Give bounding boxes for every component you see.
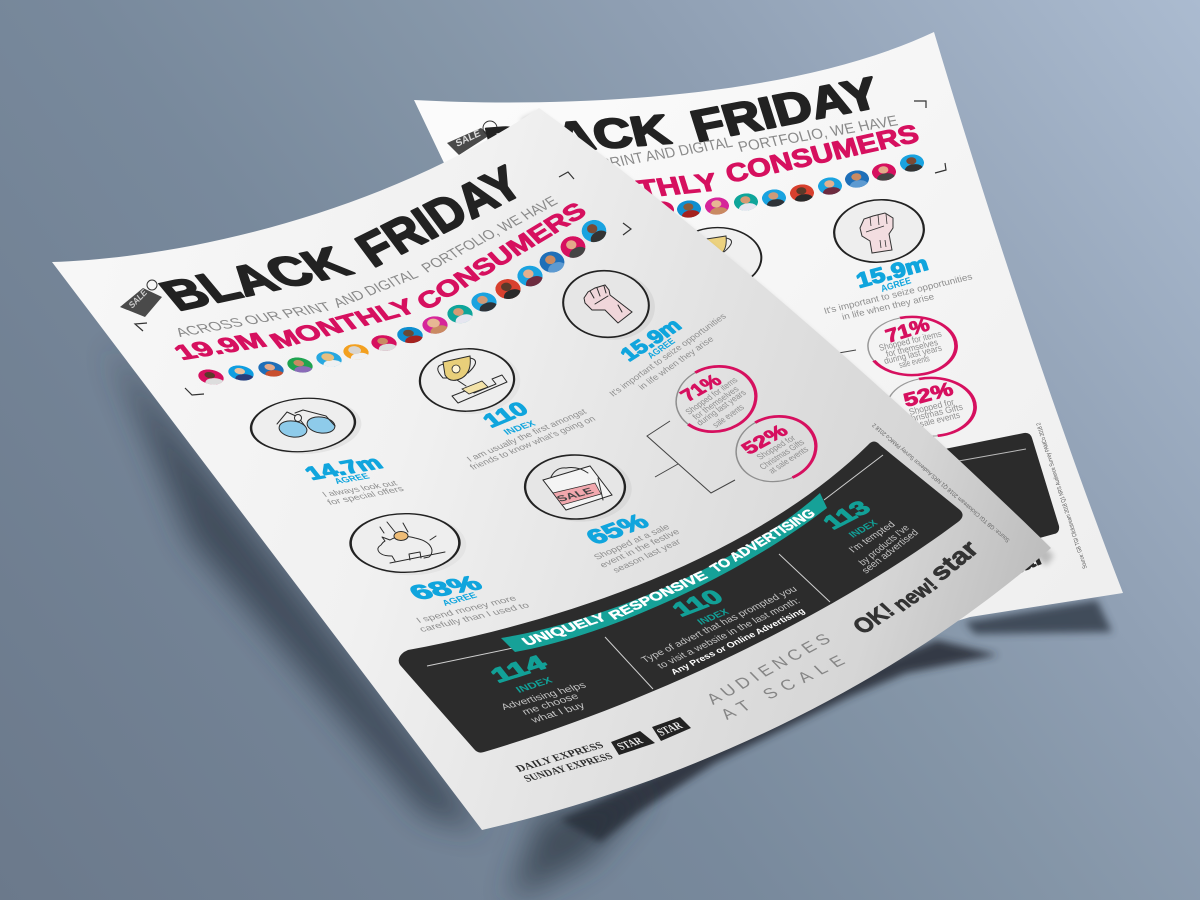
- stat: 15.9m: It's important to seize opportunities: [607, 311, 729, 398]
- logo: Daily Star: STAR: [614, 734, 646, 752]
- back stat: 15.9m: in life when they arise: [841, 291, 935, 322]
- subtitle: PORTFOLIO, WE HAVE: [418, 194, 561, 276]
- subtitle: ACROSS OUR PRINT: [172, 300, 335, 340]
- ring: 52%: [721, 403, 831, 495]
- audience headline: 19.9M: [168, 329, 273, 365]
- source note: Source: GB TGI Clickstream 2018 Q1 NRS Audience Survey PAMCo 2018 2: [871, 421, 1011, 543]
- band stat: 114: what I buy: [528, 701, 587, 726]
- icon: back fist: [824, 191, 934, 271]
- icon: binoculars: [239, 389, 374, 463]
- stat: 110: I am usually the first amongst: [465, 407, 589, 463]
- stat: 14.7m: AGREE: [332, 472, 372, 486]
- stat: 110: [465, 397, 598, 471]
- ring: 52%: Shopped for: [754, 433, 798, 461]
- back stat: 15.9m: [823, 252, 974, 322]
- back ring: 52%: Shopped for: [908, 397, 955, 417]
- icon: fist: [547, 257, 672, 353]
- back bracket line: [827, 350, 856, 355]
- back ring: 52%: 52%: [901, 379, 956, 412]
- band stat: 114: 114: [485, 651, 552, 687]
- back audience headline: [465, 120, 922, 221]
- audiences at scale: AUDIENCES: [702, 630, 835, 708]
- stat: 14.7m: [300, 452, 406, 507]
- back ring: 71%: sale events: [898, 353, 931, 370]
- ribbon: UNIQUELY: [518, 610, 611, 648]
- audience headline: [168, 198, 592, 365]
- shadow: front sheet bottom edge: [560, 640, 998, 842]
- audience headline: MONTHLY: [264, 294, 422, 354]
- subtitle: AND DIGITAL: [330, 267, 422, 311]
- title: FRIDAY: [346, 156, 533, 277]
- back stat: 110 (mostly covered): friends to know what's going on: [658, 318, 797, 360]
- band stat: 114: [485, 651, 589, 726]
- back ring: 52%: [877, 371, 985, 443]
- back subtitle: [501, 113, 900, 190]
- audience headline: CONSUMERS: [411, 198, 592, 315]
- stat: 110: INDEX: [502, 419, 539, 437]
- ring: 71%: during last years: [694, 388, 749, 427]
- band stat: 110: INDEX: [695, 607, 732, 627]
- back ring: 71%: [858, 310, 966, 382]
- back ring: 71%: during last years: [883, 343, 943, 366]
- stat: 68%: carefully than I used to: [417, 601, 531, 634]
- band stat: 114: Advertising helps: [499, 681, 589, 712]
- ring: 71%: sale events: [710, 402, 746, 429]
- icon: piggy bank: [337, 505, 480, 583]
- corner brackets: [135, 172, 631, 395]
- band stat: 110: 110: [666, 585, 728, 621]
- ribbon: TO ADVERTISING: [706, 506, 818, 575]
- band stat: 110: Any Press or Online Advertising: [668, 606, 807, 676]
- logo: Daily Express / Sunday Express: DAILY EXPRESS: [513, 740, 606, 774]
- logos: OK, new, star: OK!: [847, 599, 901, 639]
- back stat: 15.9m: It's important to seize opportunities: [823, 271, 974, 316]
- band stat: 113: seen advertised: [860, 528, 921, 576]
- ring: 52%: at sale events: [766, 444, 811, 475]
- band stat: 113: by products I've: [857, 523, 912, 568]
- title: [149, 156, 533, 319]
- dark band: [399, 442, 963, 753]
- icon: shopping bag: [508, 443, 649, 533]
- back subtitle: ACROSS OUR PRINT AND DIGITAL: [501, 134, 735, 190]
- stat: 15.9m: in life when they arise: [636, 334, 716, 391]
- front sheet paper: [52, 108, 1051, 830]
- back title: FRIDAY: [685, 67, 885, 152]
- subtitle: [172, 194, 561, 340]
- ribbon: RESPONSIVE: [605, 568, 711, 622]
- band stat: 113: I'm tempted: [847, 520, 898, 555]
- stat: 110: 110: [477, 397, 533, 432]
- band rules: [427, 455, 883, 689]
- avatars row: [194, 216, 611, 386]
- logo: Sunday Star: STAR: [654, 719, 686, 738]
- back subtitle: PORTFOLIO, WE HAVE: [736, 113, 900, 156]
- back logo: star: star: [995, 544, 1048, 585]
- back audience headline: 19.9M MONTHLY: [465, 169, 721, 221]
- band stat: 114: INDEX: [514, 676, 555, 695]
- stat: 15.9m: 15.9m: [616, 315, 686, 365]
- back stat: 15.9m: AGREE: [880, 275, 913, 295]
- stat: 65%: event in the festive: [598, 527, 682, 569]
- title: BLACK: [149, 238, 362, 319]
- shadow: back sheet on the surface: [965, 600, 1112, 634]
- stat: 15.9m: AGREE: [645, 337, 678, 361]
- stat: 68%: I spend money more: [414, 594, 519, 625]
- logo: Daily Express / Sunday Express: [513, 740, 616, 784]
- stat: 65%: 65%: [581, 510, 655, 549]
- icon: shopping bag: SALE: [554, 486, 596, 504]
- ring: 52%: Christmas Gifts: [757, 437, 807, 471]
- back sale tag: SALE: [455, 128, 482, 150]
- ring: 71%: for themselves: [690, 384, 741, 421]
- logo: Daily Express / Sunday Express: SUNDAY EXPRESS: [521, 751, 616, 784]
- ring: 71%: [661, 353, 771, 445]
- band stat: 110: Type of advert that has prompted you: [639, 584, 800, 665]
- audiences at scale: AT SCALE: [716, 652, 849, 723]
- back dark band: [900, 433, 1059, 560]
- back ring: 71%: for themselves: [885, 337, 940, 359]
- stat: 65%: [581, 510, 683, 574]
- sale tag: SALE: [127, 287, 149, 311]
- panel: front sheet: [52, 108, 1051, 830]
- ring: 71%: Shopped for items: [683, 375, 740, 416]
- logos: OK, new, star: [847, 535, 985, 639]
- ring: 71%: 71%: [676, 371, 727, 405]
- back sheet paper: [414, 32, 1123, 700]
- back avatars row: [661, 154, 924, 218]
- back stat: 15.9m: 15.9m: [854, 252, 931, 293]
- band stat: 113: 113: [817, 496, 876, 533]
- ribbon: [501, 493, 827, 652]
- stat: 65%: Shopped at a sale: [592, 522, 672, 561]
- shadow: front sheet on back sheet: [520, 112, 1054, 566]
- stat: 14.7m: I always look out: [320, 479, 400, 499]
- stat: 14.7m: for special offers: [325, 484, 406, 507]
- stat: 110: friends to know what's going on: [468, 414, 598, 471]
- logos: OK, new, star: new!: [887, 573, 943, 615]
- stat: 14.7m: 14.7m: [300, 452, 388, 484]
- band stat: 113: INDEX: [847, 518, 881, 540]
- back stat: 110 (mostly covered): I am usually the first amongst: [648, 312, 789, 354]
- back title: [481, 67, 885, 166]
- stat: 68%: [404, 572, 531, 634]
- bracket connector: [647, 421, 735, 493]
- back ring: 71%: Shopped for items: [878, 329, 943, 353]
- icon: back trophy: [664, 221, 770, 295]
- band stat: 114: me choose: [520, 691, 582, 717]
- back ring: 52%: Christmas Gifts: [904, 402, 964, 425]
- band stat: 113: [817, 496, 921, 576]
- back ring: 52%: at sale events: [910, 410, 962, 431]
- ring: 52%: 52%: [737, 422, 793, 458]
- band shape: [399, 442, 963, 753]
- back title: BLACK: [481, 106, 675, 166]
- back stat: 110 (mostly covered): [648, 312, 797, 360]
- shadow: front sheet left edge: [110, 345, 482, 830]
- panel: back sheet: [414, 32, 1123, 621]
- shadow: front sheet bottom corner: [510, 790, 650, 900]
- back corner brackets: [440, 101, 946, 173]
- back sale tag: [447, 121, 497, 155]
- back source note: Source: GB TGI Clickstream 2018 Q1 NRS Audience Survey PAMCo 2018 2: [1036, 421, 1089, 569]
- back ring: 71%: 71%: [883, 314, 932, 348]
- sale tag: [120, 280, 162, 317]
- band stat: 110: to visit a website in the last month:: [655, 596, 803, 671]
- icon: trophy: [406, 338, 534, 424]
- logos: OK, new, star: star: [923, 535, 985, 586]
- stat: 65%: season last year: [611, 537, 683, 574]
- back audience headline: CONSUMERS: [722, 120, 922, 189]
- stat: 68%: 68%: [404, 572, 488, 605]
- stat: 68%: AGREE: [440, 591, 480, 608]
